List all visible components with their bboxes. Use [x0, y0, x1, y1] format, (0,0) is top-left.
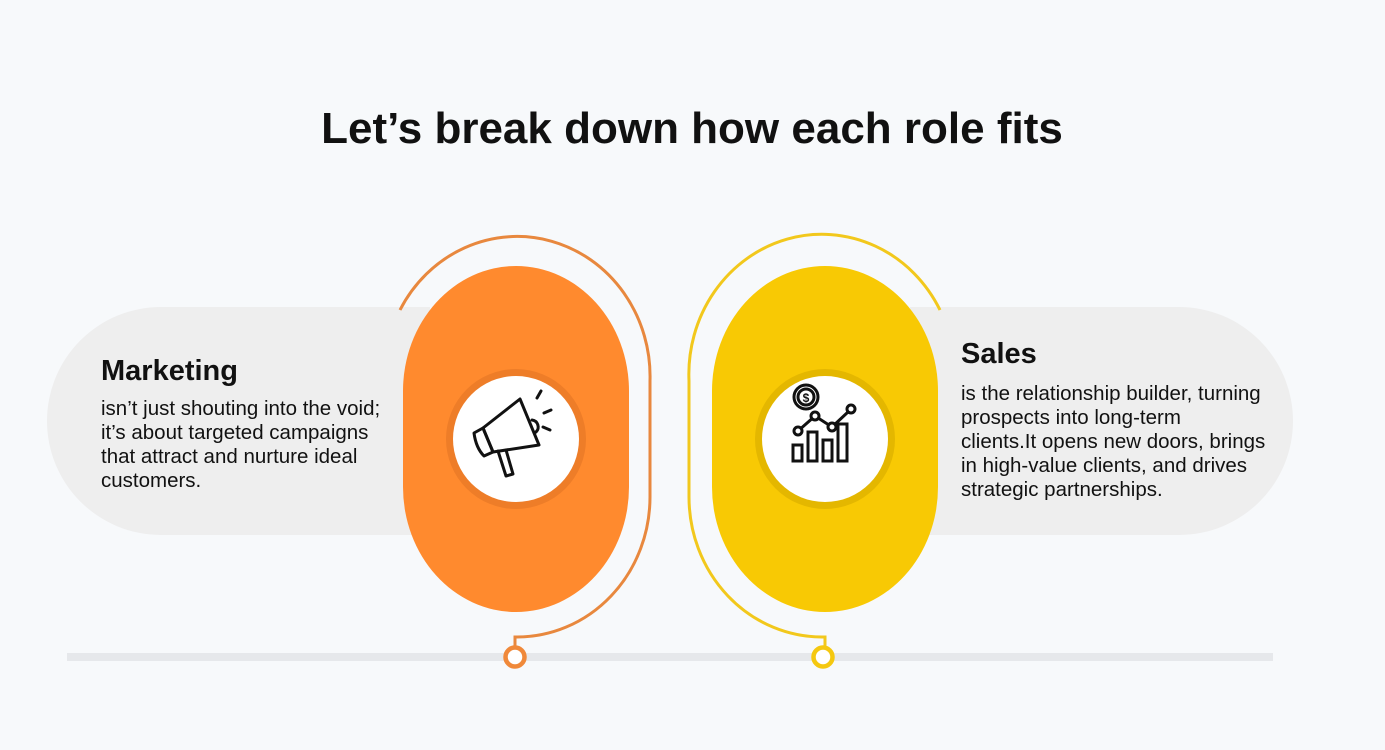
text block: sales: is the relationship builder, turning: [961, 382, 1261, 405]
text block: marketing: isn’t just shouting into the void;: [101, 397, 380, 420]
panel: sales background: [910, 307, 1293, 535]
icon: megaphone: [446, 369, 586, 509]
text block: marketing: [101, 355, 380, 492]
marker: sales dot: [814, 648, 832, 666]
text block: sales: clients.It opens new doors, brings: [961, 430, 1265, 453]
outline: sales connector: [689, 234, 940, 650]
text block: sales: prospects into long-term: [961, 406, 1181, 429]
text block: marketing: customers.: [101, 469, 201, 492]
text block: marketing: Marketing: [101, 355, 238, 387]
text block: marketing: that attract and nurture ideal: [101, 445, 357, 468]
text block: sales: Sales: [961, 338, 1037, 370]
title: Let’s break down how each role fits: [321, 104, 1063, 153]
marker: marketing dot: [506, 648, 524, 666]
text block: sales: strategic partnerships.: [961, 478, 1163, 501]
outline: marketing connector: [400, 236, 650, 650]
pill: sales: [712, 266, 938, 612]
icon: sales chart: $: [803, 391, 810, 405]
text block: sales: [961, 338, 1265, 501]
baseline timeline: [67, 653, 1273, 661]
text block: sales: in high-value clients, and drives: [961, 454, 1247, 477]
text block: marketing: it’s about targeted campaigns: [101, 421, 368, 444]
pill: marketing: [403, 266, 629, 612]
icon: sales chart: [755, 369, 895, 509]
panel: marketing background: [47, 307, 430, 535]
